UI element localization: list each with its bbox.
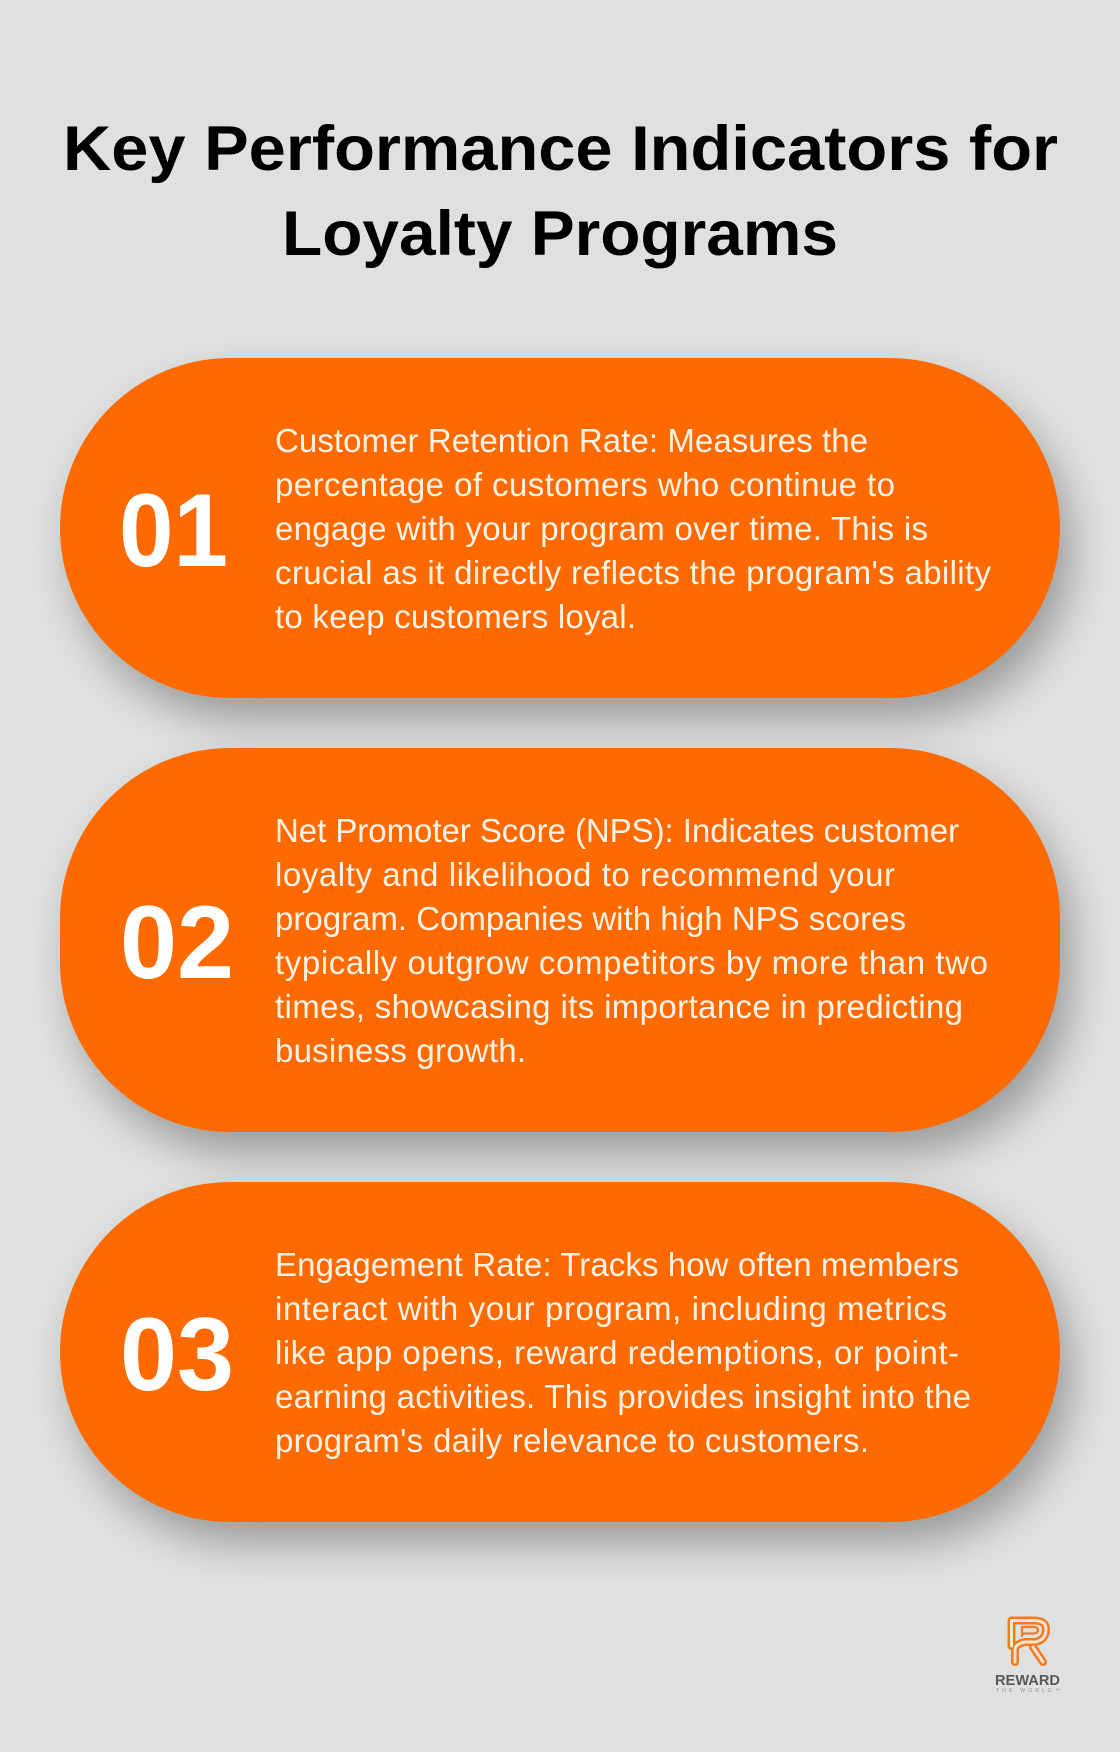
title — [63, 114, 1058, 269]
description text: Engagement Rate: Tracks how often members — [275, 1246, 959, 1283]
number 03: 03 — [120, 1297, 234, 1413]
description text: to keep customers loyal. — [275, 598, 636, 635]
description text: crucial as it directly reflects the program's ability — [275, 554, 992, 591]
description text: times, showcasing its importance in predicting — [275, 988, 963, 1025]
tagline: THE WORLD™ — [996, 1688, 1060, 1694]
number 01: 01 — [119, 473, 228, 589]
description text: percentage of customers who continue to — [275, 466, 895, 503]
title: Loyalty Programs — [282, 199, 838, 269]
logo: Reward the World — [995, 1616, 1060, 1694]
number 02: 02 — [120, 885, 234, 1001]
description text: typically outgrow competitors by more than two — [275, 944, 988, 981]
panel: customer retention rate — [60, 358, 1060, 698]
description text: program. Companies with high NPS scores — [275, 900, 906, 937]
title: Key Performance Indicators for — [63, 114, 1058, 184]
description text: business growth. — [275, 1032, 526, 1069]
description text: interact with your program, including metrics — [275, 1290, 947, 1327]
description text — [275, 1246, 971, 1459]
description text: engage with your program over time. This is — [275, 510, 928, 547]
icon: R mark — [1012, 1620, 1046, 1662]
description text: Customer Retention Rate: Measures the — [275, 422, 868, 459]
description text: Net Promoter Score (NPS): Indicates customer — [275, 812, 959, 849]
description text: earning activities. This provides insight into the — [275, 1378, 971, 1415]
wordmark: REWARD — [995, 1673, 1060, 1689]
description text: like app opens, reward redemptions, or point- — [275, 1334, 959, 1371]
description text: program's daily relevance to customers. — [275, 1422, 869, 1459]
panel: net promoter score — [60, 748, 1060, 1132]
description text — [275, 422, 992, 635]
description text — [275, 812, 988, 1069]
panel: engagement rate — [60, 1182, 1060, 1522]
description text: loyalty and likelihood to recommend your — [275, 856, 895, 893]
